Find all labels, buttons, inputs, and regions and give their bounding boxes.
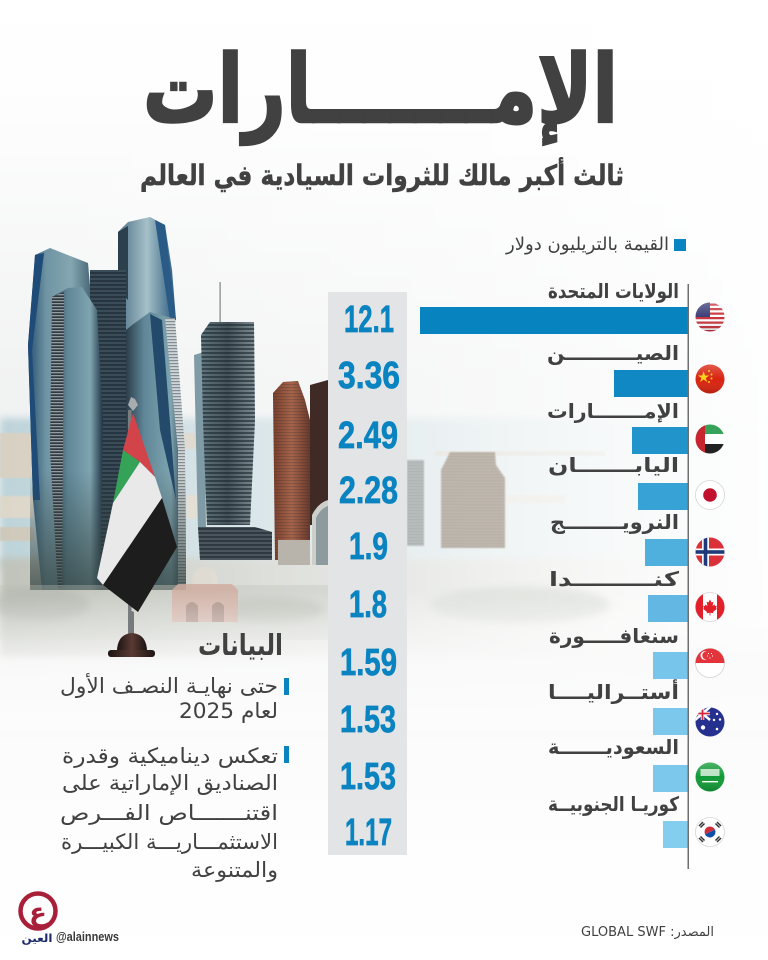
country labels: كوريـا الجنوبيــة [548,792,679,816]
flag icon: Singapore [695,648,725,678]
source note: المصدر: GLOBAL SWF [581,925,714,940]
copper towers [273,380,328,565]
note 2: الاستثمـــاريـــة الكبيـــرة [61,830,278,854]
flag icon: United States [695,302,725,332]
note 1: لعام 2025 [179,699,278,723]
title: الإمـــــــارات [143,36,618,145]
country labels: السعوديـــــــة [548,735,679,759]
country labels [547,279,679,816]
country labels: أستــراليــــا [548,678,679,704]
value numbers: 12.1 [344,299,394,341]
distant buildings [407,452,505,548]
value numbers: 1.53 [340,756,396,798]
values panel [328,292,407,855]
country labels: كنـــــــــدا [549,567,679,591]
note 1 [60,673,289,723]
country labels: اليابـــــــان [548,453,679,477]
subtitle: ثالث أكبر مالك للثروات السيادية في العالم [140,157,624,192]
notes heading: البيانات [198,628,283,662]
value numbers: 1.59 [340,642,397,684]
value numbers: 2.28 [339,470,398,512]
country labels: الإمـــــــارات [547,399,679,423]
note 2: الصناديق الإماراتية على [62,771,278,795]
panel: data notes [60,628,289,882]
value numbers: 3.36 [338,355,400,397]
social handle: @alainnews [56,930,119,944]
flag icon: Norway [695,537,725,567]
bar chart [420,284,689,869]
value numbers: 2.49 [338,415,398,457]
note 1: حتى نهايـة النصـف الأول [60,673,278,698]
palace [172,566,238,622]
flag icon: Saudi Arabia [695,762,725,792]
value numbers: 1.53 [340,699,396,741]
logo: Al Ain News: العين [22,932,52,945]
illustration: skyscrapers [0,217,328,640]
value numbers: 1.8 [349,584,387,626]
illustration: UAE desk flag [97,397,177,657]
flag icon: Australia [695,707,725,737]
legend: القيمة بالتريليون دولار [505,234,669,255]
country labels: الولايات المتحدة [548,279,679,303]
value numbers [338,299,400,854]
value numbers: 1.17 [345,812,392,854]
flag icon: Canada [695,592,725,622]
note 2: تعكس ديناميكية وقدرة [62,744,278,768]
note 2 [60,744,289,882]
logo: Al Ain News [20,894,56,945]
country labels: الصيــــــــــن [547,341,679,365]
note 2: والمتنوعة [191,858,278,882]
flag icon: UAE [695,424,725,454]
logo: Al Ain News: ع [29,898,48,928]
tower with spire [194,282,272,560]
country labels: سنغافـــــورة [549,624,679,648]
flag icon: Japan [696,480,724,510]
haze fade over lower city [0,590,768,730]
note 2: اقتنـــــــاص الفـــرص [60,801,278,825]
value numbers: 1.9 [349,526,388,568]
flag icon: South Korea [696,818,724,846]
flag icon: China [695,364,725,394]
country labels: النرويــــــــج [550,510,679,534]
